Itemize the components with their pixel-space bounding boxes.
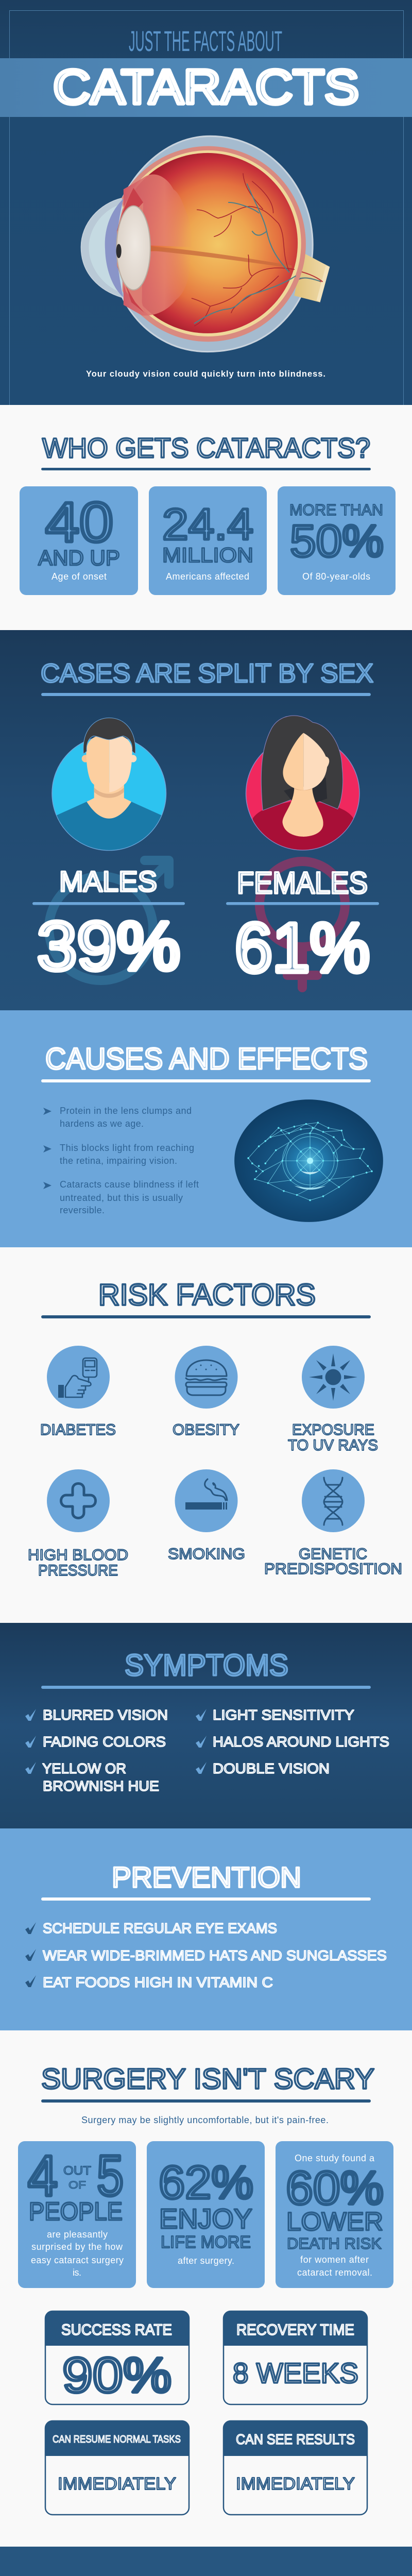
risk: obesity bbox=[173, 1346, 239, 1438]
subheading: Surgery may be slightly uncomfortable, but it's pain-free. bbox=[81, 2115, 329, 2125]
stat card: age: Age of onset bbox=[52, 571, 107, 582]
icon: male portrait bbox=[50, 718, 168, 859]
card: 60%: One study found a bbox=[295, 2153, 375, 2163]
risk: genetic predisposition bbox=[264, 1469, 402, 1578]
bullet list: untreated, but this is usually bbox=[60, 1193, 183, 1203]
card: 4 out of 5: OUT bbox=[63, 2164, 91, 2178]
heading: SURGERY ISN'T SCARY bbox=[41, 2062, 374, 2095]
label: DIABETES bbox=[40, 1421, 116, 1438]
box: recovery time bbox=[223, 2311, 368, 2404]
risk: uv exposure bbox=[288, 1346, 378, 1454]
card: 60%: LOWER bbox=[286, 2207, 383, 2236]
heading: CAUSES AND EFFECTS bbox=[45, 1042, 368, 1076]
males label: MALES bbox=[59, 865, 157, 897]
stat card: 80-year-olds: Of 80-year-olds bbox=[302, 571, 370, 582]
card: 62%: ENJOY bbox=[159, 2204, 252, 2234]
card: 60% bbox=[276, 2141, 393, 2288]
bullet list: Cataracts cause blindness if left bbox=[60, 1179, 199, 1190]
symptom list: HALOS AROUND LIGHTS bbox=[213, 1734, 389, 1750]
box: see results: IMMEDIATELY bbox=[236, 2474, 355, 2493]
card: 4 out of 5: 4 bbox=[28, 2144, 58, 2208]
title: CATARACTS bbox=[53, 60, 359, 114]
card: 60%: DEATH RISK bbox=[287, 2234, 382, 2252]
box: success rate: SUCCESS RATE bbox=[61, 2321, 172, 2338]
symptom checkmarks bbox=[25, 1709, 207, 1774]
bullet list: hardens as we age. bbox=[60, 1118, 144, 1129]
heading: PREVENTION bbox=[112, 1861, 301, 1893]
label: OBESITY bbox=[173, 1421, 239, 1438]
prevention list: SCHEDULE REGULAR EYE EXAMS bbox=[43, 1920, 277, 1936]
stat card: millions bbox=[149, 486, 267, 595]
risk: uv exposure: TO UV RAYS bbox=[288, 1437, 378, 1454]
card: 4 out of 5: easy cataract surgery bbox=[31, 2255, 124, 2265]
box: recovery time: RECOVERY TIME bbox=[236, 2321, 354, 2338]
card: 62%: 62% bbox=[159, 2157, 253, 2209]
title band bbox=[0, 58, 412, 117]
card: 4 out of 5: is. bbox=[73, 2267, 81, 2278]
stat card: 80-year-olds bbox=[278, 486, 396, 595]
stat card: millions: 24.4 bbox=[162, 500, 253, 549]
symptom list: BROWNISH HUE bbox=[43, 1778, 159, 1794]
prevention list bbox=[43, 1920, 387, 1990]
heading: RISK FACTORS bbox=[98, 1278, 316, 1312]
heading: WHO GETS CATARACTS? bbox=[42, 433, 370, 464]
males percentage: 39% bbox=[37, 908, 180, 985]
females label: FEMALES bbox=[237, 866, 368, 900]
box: success rate: 90% bbox=[62, 2348, 171, 2403]
icon: female symbol bbox=[260, 861, 345, 988]
card: 62%: after surgery. bbox=[178, 2256, 234, 2266]
card: 4 out of 5: surprised by the how bbox=[31, 2242, 123, 2252]
risk: diabetes bbox=[40, 1346, 116, 1438]
stat card: age: 40 bbox=[45, 491, 113, 554]
heading: SYMPTOMS bbox=[125, 1649, 288, 1682]
symptom list bbox=[42, 1707, 389, 1794]
panel: surgery bbox=[18, 2062, 393, 2515]
risk: smoking bbox=[168, 1469, 245, 1563]
card: 4 out of 5: are pleasantly bbox=[47, 2229, 108, 2240]
card: 62%: LIFE MORE bbox=[161, 2232, 251, 2251]
box: resume normal tasks bbox=[45, 2421, 190, 2515]
panel: hero bbox=[0, 0, 412, 405]
card: 4 out of 5: PEOPLE bbox=[29, 2198, 123, 2226]
icon: female portrait bbox=[246, 716, 359, 859]
box: see results: CAN SEE RESULTS bbox=[236, 2431, 355, 2447]
box: resume normal tasks: IMMEDIATELY bbox=[58, 2474, 176, 2493]
prevention list: EAT FOODS HIGH IN VITAMIN C bbox=[43, 1974, 273, 1990]
bullet list: This blocks light from reaching bbox=[60, 1143, 194, 1153]
stat card: millions: Americans affected bbox=[166, 571, 249, 582]
risk: high blood pressure: PRESSURE bbox=[38, 1562, 118, 1579]
box: recovery time: 8 WEEKS bbox=[233, 2357, 358, 2389]
bullet list: the retina, impairing vision. bbox=[60, 1156, 177, 1166]
card: 62% bbox=[147, 2141, 265, 2288]
panel: causes and effects bbox=[0, 1010, 412, 1247]
panel: symptoms bbox=[0, 1623, 412, 1828]
stat card: 80-year-olds: 50% bbox=[290, 516, 384, 566]
box: see results bbox=[223, 2421, 368, 2515]
symptom list: YELLOW OR bbox=[42, 1760, 126, 1776]
bullet list: reversible. bbox=[60, 1205, 105, 1215]
box: resume normal tasks: CAN RESUME NORMAL TASKS bbox=[53, 2433, 181, 2445]
symptom list: BLURRED VISION bbox=[43, 1707, 168, 1723]
label: SMOKING bbox=[168, 1546, 245, 1563]
panel: who gets cataracts bbox=[20, 433, 396, 595]
prevention checkmarks bbox=[25, 1922, 36, 1987]
panel: cases by sex bbox=[0, 630, 412, 1010]
icon: male symbol bbox=[49, 860, 169, 980]
label: HIGH BLOOD bbox=[28, 1547, 128, 1564]
risk: genetic predisposition: PREDISPOSITION bbox=[264, 1561, 402, 1578]
stat card: 80-year-olds: MORE THAN bbox=[289, 501, 383, 519]
label: GENETIC bbox=[299, 1546, 367, 1563]
panel: risk factors bbox=[28, 1278, 402, 1579]
card: 4 out of 5 bbox=[18, 2141, 136, 2288]
symptom list: DOUBLE VISION bbox=[213, 1760, 330, 1776]
risk: high blood pressure bbox=[28, 1469, 128, 1579]
symptom list: FADING COLORS bbox=[43, 1734, 166, 1750]
bullet list bbox=[43, 1106, 199, 1215]
stat card: age bbox=[20, 486, 138, 595]
prevention list: WEAR WIDE-BRIMMED HATS AND SUNGLASSES bbox=[43, 1947, 387, 1963]
stat card: age: AND UP bbox=[38, 546, 120, 570]
hero tagline: Your cloudy vision could quickly turn into blindness. bbox=[86, 369, 325, 379]
heading: CASES ARE SPLIT BY SEX bbox=[41, 658, 373, 688]
panel: call to action bbox=[0, 2547, 412, 2576]
symptom list: LIGHT SENSITIVITY bbox=[213, 1707, 354, 1723]
bullet list: Protein in the lens clumps and bbox=[60, 1106, 192, 1116]
card: 4 out of 5: 5 bbox=[97, 2144, 124, 2208]
card: 60%: 60% bbox=[286, 2162, 384, 2214]
panel: prevention bbox=[0, 1828, 412, 2030]
card: 60%: for women after bbox=[300, 2255, 369, 2265]
females percentage: 61% bbox=[235, 909, 370, 987]
icon: digital eye bbox=[234, 1099, 383, 1222]
box: success rate bbox=[45, 2311, 190, 2404]
card: 60%: cataract removal. bbox=[297, 2267, 372, 2278]
card: 4 out of 5: OF bbox=[68, 2179, 86, 2191]
label: EXPOSURE bbox=[292, 1421, 374, 1438]
stat card: millions: MILLION bbox=[162, 544, 253, 567]
eye illustration bbox=[81, 136, 330, 352]
